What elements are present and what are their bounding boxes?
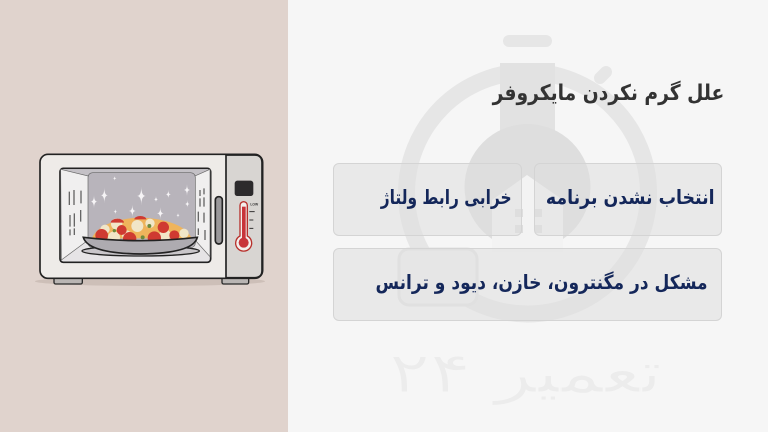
card: voltage interface failure: خرابی رابط ولتاژ bbox=[381, 186, 512, 209]
card: voltage interface failure bbox=[333, 163, 522, 236]
watermark: flask timer logo and wordmark: تعمیر ۲۴ bbox=[389, 340, 662, 405]
card: program not selected: انتخاب نشدن برنامه bbox=[546, 186, 715, 209]
card: program not selected bbox=[534, 163, 722, 236]
icon: microwave with food and thermometer bbox=[35, 154, 265, 286]
title: علل گرم نکردن مایکروفر bbox=[492, 81, 724, 106]
panel: illustration background bbox=[0, 0, 288, 432]
card: magnetron, capacitor, diode and transformer problem: مشکل در مگنترون، خازن، دیود و ترانس bbox=[376, 271, 708, 294]
sparkles bbox=[90, 176, 190, 219]
icon: microwave with food and thermometer: LOW bbox=[250, 202, 259, 206]
card: magnetron, capacitor, diode and transformer problem bbox=[333, 248, 722, 321]
thermometer bbox=[236, 202, 252, 251]
